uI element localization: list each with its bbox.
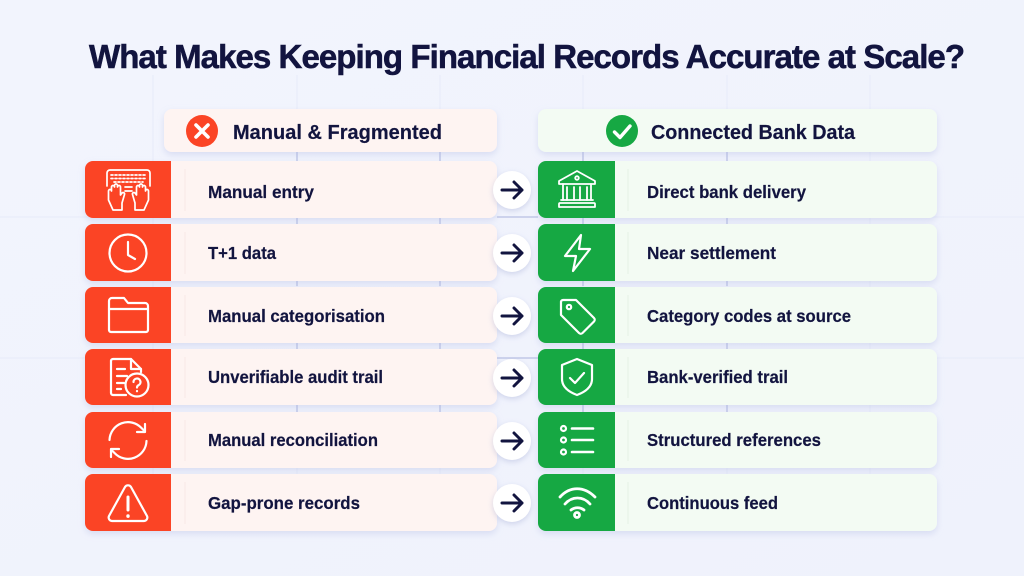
row: Unverifiable audit trail [85, 349, 497, 405]
arrow 4 [493, 359, 531, 397]
icon: lightning bolt [565, 235, 590, 271]
icon: folder [109, 298, 148, 332]
heading: Manual & Fragmented [164, 109, 497, 152]
label: T+1 data [208, 243, 276, 263]
icon: price tag [561, 300, 595, 334]
icon: clock [110, 234, 146, 272]
icon: warning triangle [109, 485, 147, 521]
icon: shield with check [562, 359, 592, 395]
row: Structured references [538, 412, 937, 468]
row: Gap-prone records [85, 474, 497, 531]
label: Manual reconciliation [208, 430, 378, 450]
arrow 5 [493, 422, 531, 460]
icon: document with question mark [111, 359, 148, 396]
label: Gap-prone records [208, 493, 360, 513]
icon: sync arrows [110, 422, 146, 459]
heading: Connected Bank Data [538, 109, 937, 152]
panel: connected bank data column [538, 109, 937, 531]
arrow 2 [493, 234, 531, 272]
label: Unverifiable audit trail [208, 367, 383, 387]
row: Direct bank delivery [538, 161, 937, 218]
heading: Manual & Fragmented: Manual & Fragmented [233, 122, 442, 144]
label: Near settlement [647, 243, 776, 263]
title: What Makes Keeping Financial Records Accurate at Scale? [89, 38, 965, 75]
icon: bank building [559, 171, 595, 207]
row: Continuous feed [538, 474, 937, 531]
arrow 3 [493, 297, 531, 335]
row: Category codes at source [538, 287, 937, 343]
arrow 6 [493, 484, 531, 522]
row: Manual categorisation [85, 287, 497, 343]
icon: keyboard and hands [107, 170, 150, 210]
row: Manual reconciliation [85, 412, 497, 468]
arrow 1 [493, 171, 531, 209]
row: Near settlement [538, 224, 937, 281]
label: Category codes at source [647, 306, 851, 326]
row: Bank-verified trail [538, 349, 937, 405]
icon: bullet list [561, 426, 593, 454]
row: T+1 data [85, 224, 497, 281]
label: Direct bank delivery [647, 182, 806, 202]
heading: Connected Bank Data: Connected Bank Data [651, 122, 856, 144]
label: Bank-verified trail [647, 367, 788, 387]
label: Manual entry [208, 182, 314, 202]
label: Manual categorisation [208, 306, 385, 326]
label: Structured references [647, 430, 821, 450]
row: Manual entry [85, 161, 497, 218]
label: Continuous feed [647, 493, 778, 513]
panel: manual and fragmented column [85, 109, 497, 531]
icon: wifi signal [560, 489, 595, 518]
